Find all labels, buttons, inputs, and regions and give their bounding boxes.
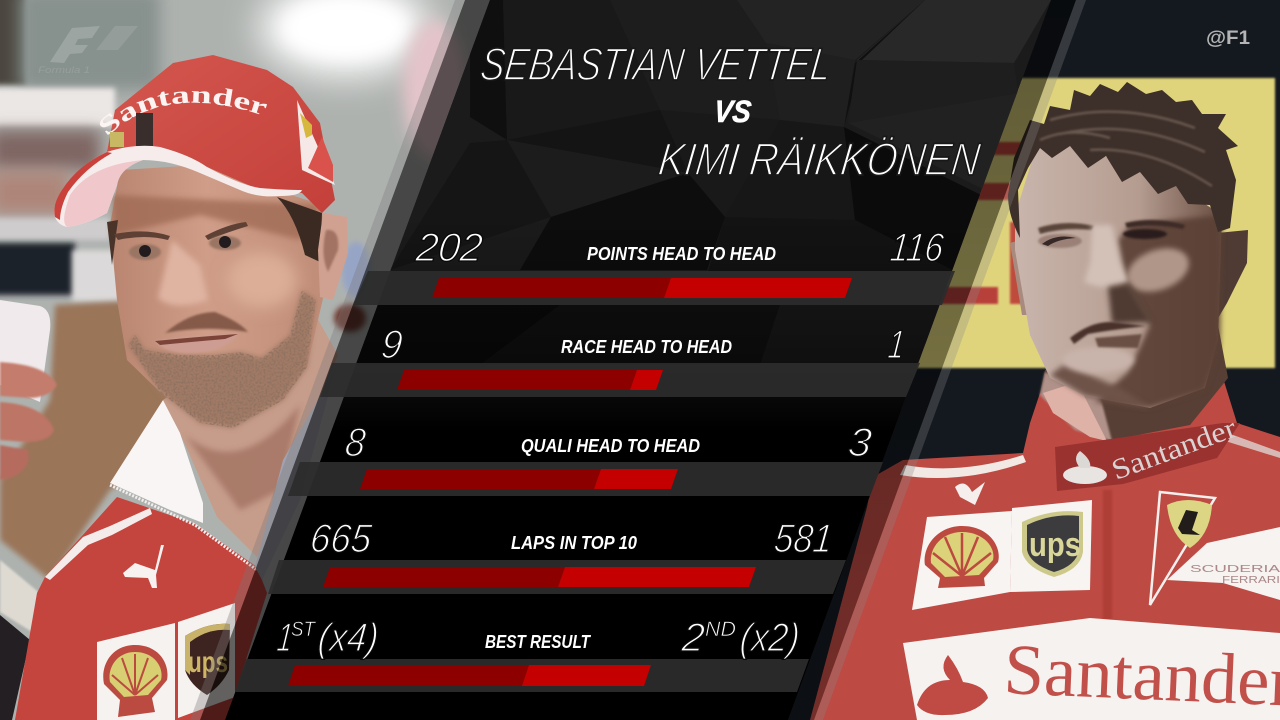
sponsor panel: ups bbox=[1010, 500, 1092, 592]
suit bbox=[810, 325, 1280, 720]
neck bbox=[163, 300, 338, 557]
collar with sponsor bbox=[1055, 422, 1240, 491]
centre seam bbox=[1103, 490, 1112, 620]
eyes and brows bbox=[1038, 220, 1185, 248]
lower jaw shading bbox=[1050, 364, 1150, 408]
stat row: best result bbox=[275, 616, 802, 686]
hair side bbox=[107, 197, 322, 265]
stat row: race head to head: 9 bbox=[379, 323, 405, 367]
beard bbox=[128, 290, 316, 428]
stat row: quali head to head bbox=[343, 421, 874, 489]
ears bbox=[1010, 230, 1248, 320]
stat row: race head to head: 1 bbox=[886, 323, 907, 367]
ear bbox=[318, 213, 348, 300]
stat row: best result: (x2) bbox=[738, 616, 802, 660]
stat row: best result: 1 bbox=[275, 616, 295, 660]
low-poly facets bbox=[225, 0, 1051, 720]
stat row: laps in top 10: LAPS IN TOP 10 bbox=[511, 533, 637, 553]
formula 1 watermark logo bbox=[38, 26, 138, 75]
face bbox=[107, 165, 348, 428]
stat row: laps in top 10: 665 bbox=[308, 517, 374, 561]
collar with sponsor: Santander bbox=[1107, 412, 1241, 487]
stat row: best result: 2 bbox=[679, 616, 707, 660]
sponsor panel: ups: ups bbox=[188, 646, 228, 679]
title bbox=[478, 38, 984, 185]
chest sponsor band bbox=[903, 618, 1280, 720]
eyebrows and eyes bbox=[114, 222, 248, 260]
formula 1 watermark logo: Formula 1 bbox=[38, 65, 90, 75]
stat row: points head to head: 116 bbox=[888, 226, 946, 270]
Ferrari emblem and swoosh: FERRARI bbox=[1222, 575, 1280, 586]
stat row: race head to head: RACE HEAD TO HEAD bbox=[561, 337, 732, 357]
photo: Kimi Räikkönen bbox=[810, 78, 1280, 720]
lit cheek bbox=[1126, 245, 1192, 295]
jacket bbox=[15, 396, 322, 720]
left edge strips bbox=[190, 0, 490, 720]
forehead shading bbox=[112, 195, 320, 240]
neck bbox=[1040, 325, 1228, 441]
right edge strips bbox=[788, 0, 1086, 720]
stat row: quali head to head: 8 bbox=[343, 421, 368, 465]
stat row: quali head to head: 3 bbox=[846, 421, 874, 465]
Ferrari emblem and swoosh: SCUDERIA bbox=[1190, 564, 1280, 575]
flag patch bbox=[110, 113, 153, 147]
jacket stripe bbox=[45, 508, 152, 580]
blurred crowd backdrop bbox=[0, 0, 500, 720]
hair bbox=[1008, 82, 1238, 238]
stat row: quali head to head: QUALI HEAD TO HEAD bbox=[521, 436, 700, 456]
stat row: best result: BEST RESULT bbox=[485, 632, 592, 652]
stat row: best result: (x4) bbox=[316, 616, 381, 660]
stat row: points head to head bbox=[413, 226, 946, 298]
phone and hand bbox=[0, 300, 57, 480]
stat row: laps in top 10 bbox=[308, 517, 835, 587]
mouth bbox=[155, 334, 238, 353]
Ferrari patch bbox=[297, 100, 335, 185]
shoulder piping bbox=[900, 455, 1026, 478]
chin light bbox=[1062, 347, 1134, 373]
cap bbox=[54, 55, 335, 227]
mouth bbox=[1070, 322, 1146, 348]
stat row: race head to head bbox=[379, 323, 907, 390]
driver name: Vettel: SEBASTIAN VETTEL bbox=[478, 38, 834, 90]
photo: Sebastian Vettel bbox=[0, 0, 490, 720]
face bbox=[1015, 135, 1222, 408]
face shadow bbox=[1095, 215, 1222, 408]
source handle: @F1 bbox=[1206, 28, 1250, 49]
collar bbox=[110, 400, 203, 523]
sponsor panel: ups bbox=[178, 603, 235, 718]
stat row: points head to head: 202 bbox=[413, 226, 485, 270]
Ferrari emblem and swoosh bbox=[1150, 492, 1280, 605]
stat row: best result: ND bbox=[705, 618, 736, 641]
sponsor panel: ups: ups bbox=[1029, 526, 1081, 564]
stat row: best result: ST bbox=[291, 618, 317, 641]
sponsor panel: shell bbox=[912, 511, 1012, 610]
nose bbox=[158, 240, 208, 306]
central dark panel bbox=[225, 0, 1051, 720]
nose bbox=[1084, 225, 1128, 287]
puma logo bbox=[123, 545, 164, 588]
stat row: points head to head: POINTS HEAD TO HEAD bbox=[587, 244, 776, 264]
yellow podium board bbox=[900, 78, 1275, 368]
brim bbox=[54, 146, 302, 227]
sponsor panel: shell bbox=[97, 623, 175, 720]
versus label: VS bbox=[712, 94, 753, 129]
cap sponsor text: Santander bbox=[100, 88, 267, 135]
cheek light bbox=[227, 252, 297, 308]
stat row: laps in top 10: 581 bbox=[772, 517, 835, 561]
diagonal nose shadow bbox=[1108, 283, 1152, 324]
driver name: Räikkönen: KIMI RÄIKKÖNEN bbox=[656, 133, 984, 185]
stat bands bbox=[235, 271, 955, 692]
